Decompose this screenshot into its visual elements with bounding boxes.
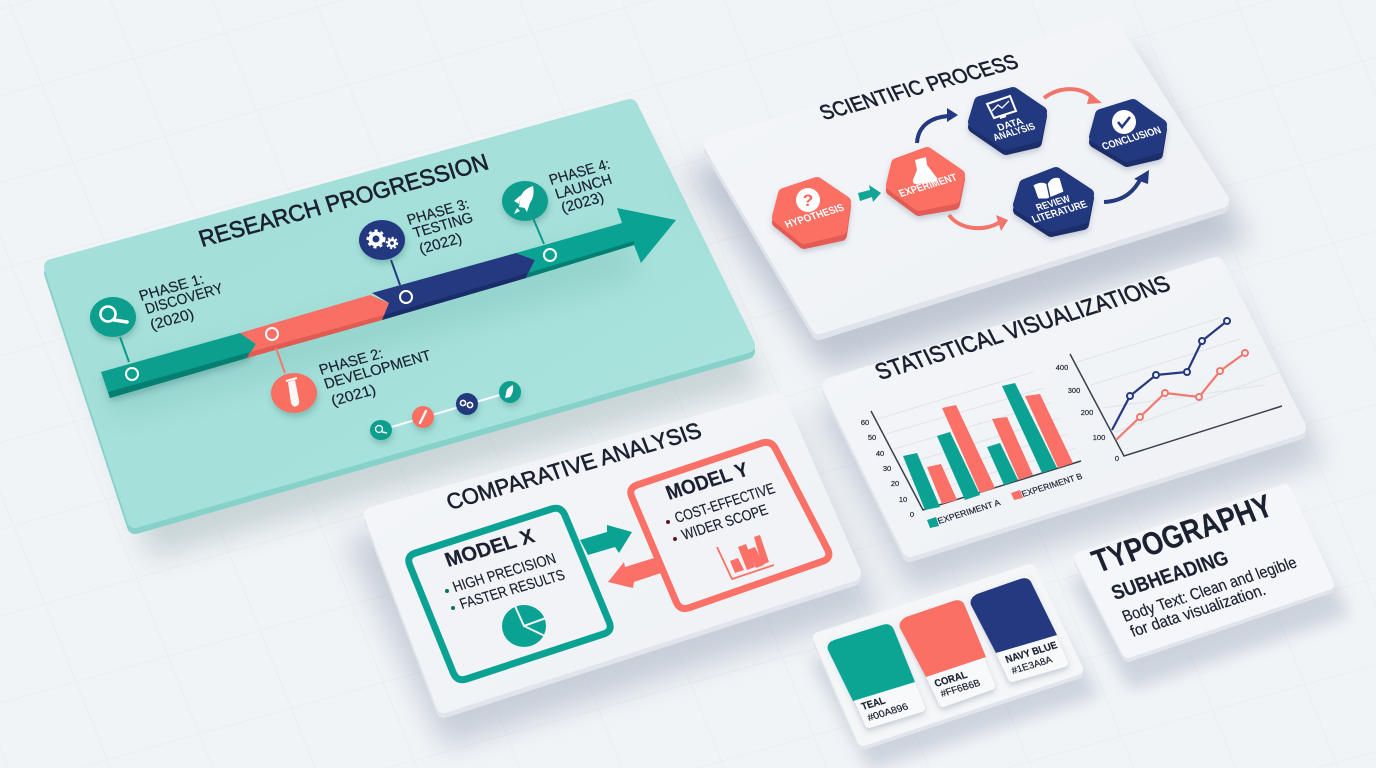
swatch: coral: #FF6B6B (939, 678, 982, 700)
card: model x: FASTER RESULTS (458, 567, 568, 613)
line chart: 0 (1115, 454, 1119, 463)
arrow: model y to model x (608, 558, 661, 588)
step: review literature: REVIEW (1034, 193, 1073, 214)
step: hypothesis: ? (803, 191, 813, 210)
phase 2 label: DEVELOPMENT (322, 348, 433, 393)
card: model y: MODEL Y (663, 459, 752, 505)
card: model x (409, 508, 610, 680)
heading: typography: TYPOGRAPHY (1087, 487, 1278, 580)
step: hypothesis (778, 183, 847, 243)
icon: bar chart (717, 535, 774, 579)
bar chart: 10 (899, 495, 907, 504)
swatch: navy blue: #1E3A8A (1010, 654, 1055, 677)
heading: scientific process: SCIENTIFIC PROCESS (816, 50, 1022, 125)
arrow: data analysis to conclusion (1044, 89, 1102, 104)
phase 3 label: (2022) (417, 231, 464, 258)
phase 4 label: (2023) (559, 190, 606, 217)
legend: experiments: EXPERIMENT B (1020, 471, 1084, 499)
step: conclusion (1095, 105, 1163, 161)
line chart: 100 (1093, 433, 1105, 442)
line chart (1056, 318, 1282, 463)
phase 1 label: PHASE 1: (137, 272, 206, 305)
phase 2 label: (2021) (329, 382, 378, 410)
step: review literature: LITERATURE (1030, 199, 1090, 226)
panel: scientific process (685, 26, 1250, 372)
phase 2 label: PHASE 2: (317, 346, 385, 379)
arrow: experiment to review literature (949, 215, 1008, 231)
phase 4 marker (502, 181, 556, 261)
phase 1 marker (90, 297, 138, 380)
step: experiment (892, 153, 960, 210)
arrow: model x to model y (580, 525, 632, 555)
icon: pie chart (502, 605, 546, 647)
bar chart: 60 (861, 418, 869, 427)
card: model x: HIGH PRECISION (451, 551, 558, 596)
swatch: navy blue: NAVY BLUE (1004, 640, 1059, 666)
card: model y: COST-EFFECTIVE (673, 481, 778, 527)
step: review literature (1019, 173, 1090, 231)
step: data analysis: DATA (995, 116, 1025, 134)
panel: typography (1070, 487, 1350, 690)
heading: statistical visualizations: STATISTICAL VISUALIZATIONS (870, 270, 1174, 385)
swatch: teal: TEAL (860, 696, 887, 713)
phase 1 label: (2020) (148, 306, 196, 334)
phase 3 label: TESTING (411, 210, 475, 242)
phase 1 label (137, 272, 225, 334)
bar chart: 50 (868, 433, 876, 442)
phase 4 label: PHASE 4: (547, 157, 612, 189)
bar chart: 30 (883, 464, 891, 473)
panel: comparative analysis (345, 401, 880, 748)
step: data analysis (974, 93, 1041, 149)
heading: research progression: RESEARCH PROGRESSION (195, 149, 492, 252)
step: experiment: EXPERIMENT (897, 172, 960, 200)
mini timeline icons (370, 381, 521, 440)
swatch: teal: #00A896 (866, 701, 910, 724)
panel: research progression (52, 107, 765, 560)
phase 1 label: DISCOVERY (143, 281, 225, 318)
bar chart (861, 372, 1081, 519)
bar chart: 40 (876, 449, 884, 458)
phase 4 label: LAUNCH (553, 172, 614, 203)
panel: statistical visualizations (815, 265, 1325, 592)
bar chart: 0 (910, 510, 914, 519)
phase 2 marker (266, 328, 317, 413)
line chart: 200 (1081, 408, 1093, 417)
line chart: 400 (1056, 363, 1068, 372)
card: model y: WIDER SCOPE (680, 502, 771, 544)
heading: comparative analysis: COMPARATIVE ANALYSIS (443, 418, 705, 515)
phase 3 label (405, 196, 475, 258)
phase 3 marker (359, 220, 412, 303)
arrow: hypothesis to experiment (858, 185, 881, 202)
legend: experiments (927, 471, 1084, 528)
bar chart: 20 (891, 479, 899, 488)
swatch: coral (900, 600, 991, 703)
timeline arrow (101, 208, 676, 398)
swatch: coral: CORAL (933, 670, 969, 690)
swatch: navy blue (971, 578, 1064, 678)
subheading: SUBHEADING (1108, 547, 1232, 605)
legend: experiments: EXPERIMENT A (936, 497, 1002, 526)
step: hypothesis: HYPOTHESIS (783, 203, 847, 231)
arrow: experiment to data analysis (917, 108, 958, 143)
phase 4 label (547, 157, 614, 217)
card: model x: MODEL X (442, 525, 538, 572)
phase 3 label: PHASE 3: (405, 196, 471, 229)
body text: Body Text: Clean and legible (1120, 554, 1300, 626)
arrow: review literature to conclusion (1104, 170, 1149, 202)
step: conclusion: CONCLUSION (1100, 125, 1163, 153)
line chart: 300 (1068, 386, 1080, 395)
panel: colour palette (810, 570, 1100, 768)
phase 2 label (317, 346, 433, 410)
step: data analysis: ANALYSIS (991, 121, 1038, 144)
swatch: teal (828, 624, 921, 724)
body text: for data visualization. (1128, 582, 1269, 641)
card: model y (631, 442, 829, 609)
